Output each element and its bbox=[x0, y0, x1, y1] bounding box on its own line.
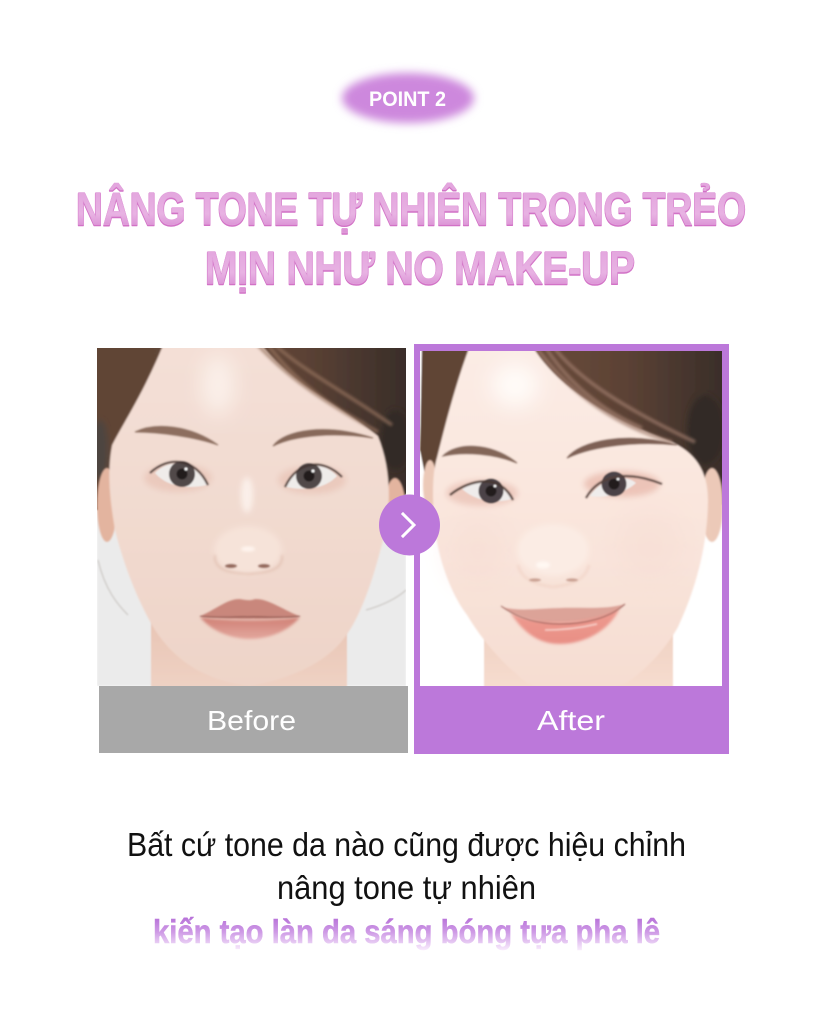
description line 1: Bất cứ tone da nào cũng được hiệu chỉnh bbox=[127, 826, 686, 863]
purple frame bbox=[414, 344, 729, 754]
badge: POINT 2: POINT 2 bbox=[369, 88, 446, 111]
band: before label: Before bbox=[207, 705, 296, 736]
brows bbox=[443, 446, 517, 463]
title line 2: MỊN NHƯ NO MAKE-UP bbox=[205, 242, 635, 294]
lips bbox=[502, 604, 625, 622]
infographic canvas bbox=[78, 66, 746, 950]
left eye bbox=[144, 464, 212, 492]
neck bbox=[150, 624, 348, 686]
text block: description bbox=[127, 826, 686, 950]
fringe strands bbox=[258, 345, 392, 432]
grey hair lower side bbox=[97, 422, 108, 478]
nose bbox=[520, 536, 585, 574]
forehead shine bbox=[202, 355, 234, 415]
face bbox=[433, 345, 708, 692]
panel: before bbox=[90, 340, 412, 753]
right eye bbox=[278, 466, 346, 494]
title line 2: MỊN NHƯ NO MAKE-UP bbox=[205, 242, 635, 294]
brows bbox=[135, 426, 218, 445]
ears bbox=[704, 466, 722, 543]
description highlight: kiến tạo làn da sáng bóng tựa pha lê bbox=[153, 913, 660, 950]
photo: before face bbox=[90, 340, 412, 690]
stray hairs bbox=[98, 560, 406, 615]
ears bbox=[97, 468, 117, 542]
icon: arrow circle bbox=[379, 494, 440, 556]
face bbox=[109, 340, 389, 686]
badge: POINT 2 bbox=[342, 73, 474, 123]
lips bbox=[200, 599, 300, 619]
description line 2: nâng tone tự nhiên bbox=[277, 869, 536, 906]
panel: after bbox=[414, 344, 730, 754]
cheek tint bbox=[614, 509, 686, 581]
right eye bbox=[584, 471, 660, 497]
left eye bbox=[446, 480, 518, 506]
hair back bbox=[420, 351, 722, 505]
hair back bbox=[90, 340, 412, 510]
neck bbox=[484, 635, 674, 686]
title bbox=[76, 182, 746, 294]
band: before label bbox=[99, 686, 408, 753]
after label: After bbox=[537, 705, 605, 736]
photo: after face bbox=[420, 345, 730, 692]
forehead shine bbox=[491, 363, 539, 407]
nose bbox=[216, 528, 280, 572]
fringe strands bbox=[535, 345, 695, 442]
